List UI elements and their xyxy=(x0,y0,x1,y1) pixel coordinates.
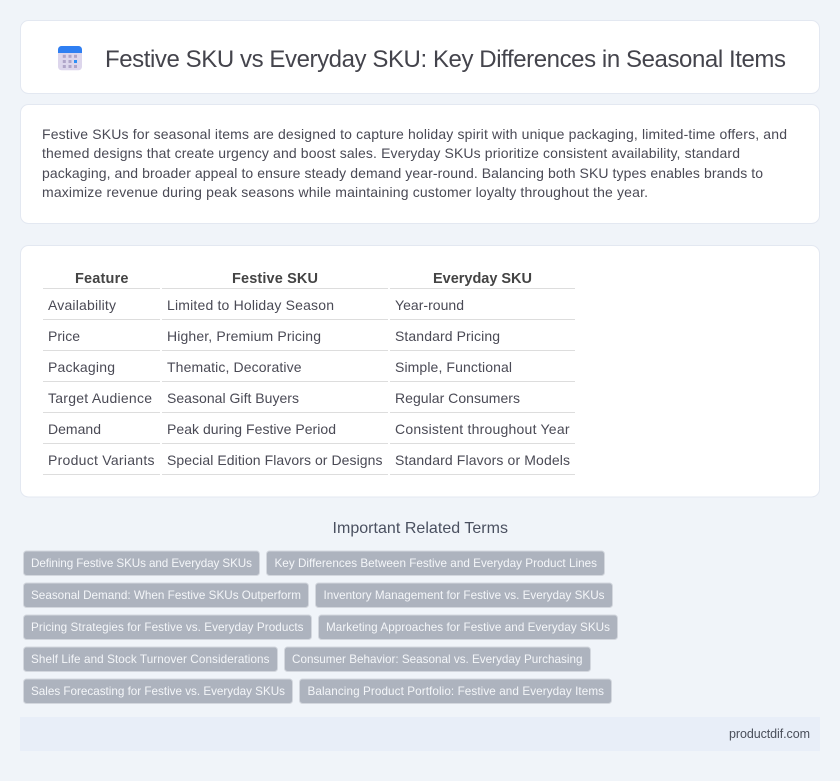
tag: pricing: Pricing Strategies for Festive vs. Everyday Products xyxy=(31,621,304,634)
table header row: Everyday SKU xyxy=(433,271,532,287)
row: availability: Year-round xyxy=(395,297,464,313)
tag: balancing: Balancing Product Portfolio: Festive and Everyday Items xyxy=(308,685,604,698)
tag: shelf life: Shelf Life and Stock Turnover Considerations xyxy=(31,653,270,666)
row: product variants: Product Variants xyxy=(48,452,154,468)
row: target audience: Seasonal Gift Buyers xyxy=(167,390,299,406)
intro text: Festive SKUs for seasonal items are designed to capture holiday spirit with unique packaging, limited-time offers, and xyxy=(42,126,787,142)
row: target audience: Target Audience xyxy=(48,390,152,406)
tag: defining: Defining Festive SKUs and Everyday SKUs xyxy=(31,557,252,570)
heading: related terms: Important Related Terms xyxy=(332,520,508,537)
table header row: Feature xyxy=(75,271,128,287)
tag: consumer behavior: Consumer Behavior: Seasonal vs. Everyday Purchasing xyxy=(292,653,582,666)
intro text: maximize revenue during peak seasons while maintaining customer loyalty throughout the year. xyxy=(42,184,648,200)
related term tags xyxy=(24,551,618,704)
panel: intro paragraph xyxy=(20,104,820,224)
row: demand xyxy=(48,421,570,437)
table header row xyxy=(75,271,532,287)
tag: marketing: Marketing Approaches for Festive and Everyday SKUs xyxy=(326,621,610,634)
row: packaging: Simple, Functional xyxy=(395,359,512,375)
tag: defining xyxy=(24,551,260,576)
tag: sales forecasting: Sales Forecasting for Festive vs. Everyday SKUs xyxy=(31,685,285,698)
row: availability: Limited to Holiday Season xyxy=(167,297,334,313)
tag: balancing xyxy=(300,679,612,704)
row: price xyxy=(48,328,500,344)
tag: key differences xyxy=(266,551,604,576)
row: product variants: Special Edition Flavors or Designs xyxy=(167,452,382,468)
row: product variants xyxy=(48,452,570,468)
tag: seasonal demand xyxy=(24,583,308,608)
row: price: Higher, Premium Pricing xyxy=(167,328,321,344)
table header row: Festive SKU xyxy=(232,271,318,287)
footer source: productdif.com xyxy=(729,727,810,741)
title: Festive SKU vs Everyday SKU: Key Differences in Seasonal Items xyxy=(105,46,786,73)
tag: consumer behavior xyxy=(284,647,590,672)
icon: calendar xyxy=(58,46,82,70)
tag: key differences: Key Differences Between Festive and Everyday Product Lines xyxy=(274,557,597,570)
panel: comparison table xyxy=(20,246,820,497)
row: price: Price xyxy=(48,328,80,344)
intro text: packaging, and broader appeal to ensure steady demand year-round. Balancing both SKU types enables brands to xyxy=(42,165,763,181)
row: availability xyxy=(48,297,464,313)
row: packaging: Thematic, Decorative xyxy=(167,359,302,375)
row: target audience: Regular Consumers xyxy=(395,390,520,406)
row: price: Standard Pricing xyxy=(395,328,500,344)
row: availability: Availability xyxy=(48,297,116,313)
row: product variants: Standard Flavors or Models xyxy=(395,452,570,468)
tag: marketing xyxy=(318,615,618,640)
row: demand: Consistent throughout Year xyxy=(395,421,570,437)
footer xyxy=(20,717,820,751)
panel: header xyxy=(20,20,820,94)
tag: shelf life xyxy=(24,647,278,672)
tag: pricing xyxy=(24,615,312,640)
intro text xyxy=(42,126,787,200)
row: demand: Demand xyxy=(48,421,101,437)
row: packaging xyxy=(48,359,512,375)
tag: sales forecasting xyxy=(24,679,292,704)
row: packaging: Packaging xyxy=(48,359,115,375)
row: demand: Peak during Festive Period xyxy=(167,421,336,437)
tag: seasonal demand: Seasonal Demand: When Festive SKUs Outperform xyxy=(31,589,301,602)
tag: inventory xyxy=(316,583,612,608)
row: target audience xyxy=(48,390,520,406)
intro text: themed designs that create urgency and boost sales. Everyday SKUs prioritize consistent availability, standard xyxy=(42,145,740,161)
tag: inventory: Inventory Management for Festive vs. Everyday SKUs xyxy=(324,589,605,602)
